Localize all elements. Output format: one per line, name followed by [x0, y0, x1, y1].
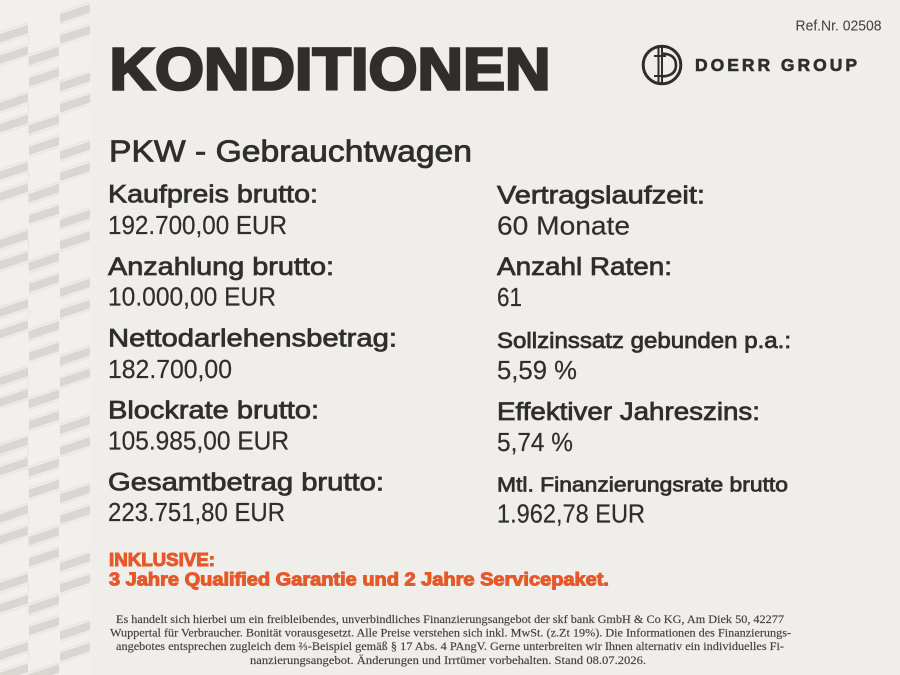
Nettodarlehensbetrag: Nettodarlehensbetrag: [108, 325, 397, 353]
legal footnote: Es handelt sich hierbei um ein freibleibendes, unverbindliches Finanzierungsangebot der skf bank GmbH & Co KG, Am Diek 50, 42277 [116, 614, 784, 626]
Kaufpreis: Kaufpreis brutto: [108, 180, 318, 208]
legal footnote: Wuppertal für Verbraucher. Bonität vorausgesetzt. Alle Preise verstehen sich inkl. MwSt. (z.Zt 19%). Die Informationen des Finanzierungs- [110, 628, 791, 640]
legal footnote: nanzierungsangebot. Änderungen und Irrtümer vorbehalten. Stand 08.07.2026. [250, 653, 646, 667]
panel: right column [497, 181, 791, 528]
Anzahlung: Anzahlung brutto: [108, 253, 334, 281]
Sollzinssatz [497, 328, 791, 385]
Anzahlung: 10.000,00 EUR [108, 282, 276, 312]
Effektiver Jahreszins: 5,74 % [497, 427, 573, 457]
Nettodarlehensbetrag [108, 325, 397, 384]
legal footnote: angebotes entsprechen zugleich dem ⅔-Beispiel gemäß § 17 Abs. 4 PAngV. Gerne unterbreiten wir Ihnen alternativ ein individuelles Fi- [116, 641, 784, 653]
reference number: Ref.Nr. 02508 [796, 18, 882, 34]
subtitle: PKW - Gebrauchtwagen [109, 134, 472, 168]
Sollzinssatz: Sollzinssatz gebunden p.a.: [497, 328, 791, 353]
callout: inclusive services: 3 Jahre Qualified Garantie und 2 Jahre Servicepaket. [109, 569, 609, 589]
panel: left column [108, 180, 397, 527]
title: KONDITIONEN [110, 36, 550, 102]
Kaufpreis: 192.700,00 EUR [108, 210, 287, 240]
Gesamtbetrag [108, 469, 384, 527]
callout: inclusive services [109, 550, 609, 589]
wordmark: DOERR GROUP [695, 55, 860, 75]
legal footnote [110, 614, 791, 667]
Anzahl Raten [497, 253, 672, 312]
Anzahlung [108, 253, 334, 312]
Effektiver Jahreszins: Effektiver Jahreszins: [497, 398, 760, 426]
Sollzinssatz: 5,59 % [497, 355, 577, 385]
Blockrate: 105.985,00 EUR [108, 425, 289, 455]
Effektiver Jahreszins [497, 398, 760, 457]
Blockrate: Blockrate brutto: [108, 396, 319, 424]
Monatliche Rate: Mtl. Finanzierungsrate brutto [497, 474, 788, 497]
callout: inclusive services: INKLUSIVE: [109, 550, 215, 570]
Anzahl Raten: 61 [497, 282, 522, 312]
Nettodarlehensbetrag: 182.700,00 [108, 354, 232, 384]
Vertragslaufzeit: 60 Monate [497, 210, 630, 240]
Monatliche Rate: 1.962,78 EUR [497, 498, 645, 528]
Gesamtbetrag: Gesamtbetrag brutto: [108, 469, 384, 497]
icon: monogram [643, 45, 681, 84]
Vertragslaufzeit: Vertragslaufzeit: [497, 181, 705, 209]
Anzahl Raten: Anzahl Raten: [497, 253, 672, 281]
Monatliche Rate [497, 474, 788, 528]
Kaufpreis [108, 180, 318, 240]
decorative stripe band [0, 0, 91, 675]
logo: Doerr Group [643, 45, 860, 84]
Blockrate [108, 396, 319, 455]
Gesamtbetrag: 223.751,80 EUR [108, 497, 285, 527]
Vertragslaufzeit [497, 181, 705, 240]
